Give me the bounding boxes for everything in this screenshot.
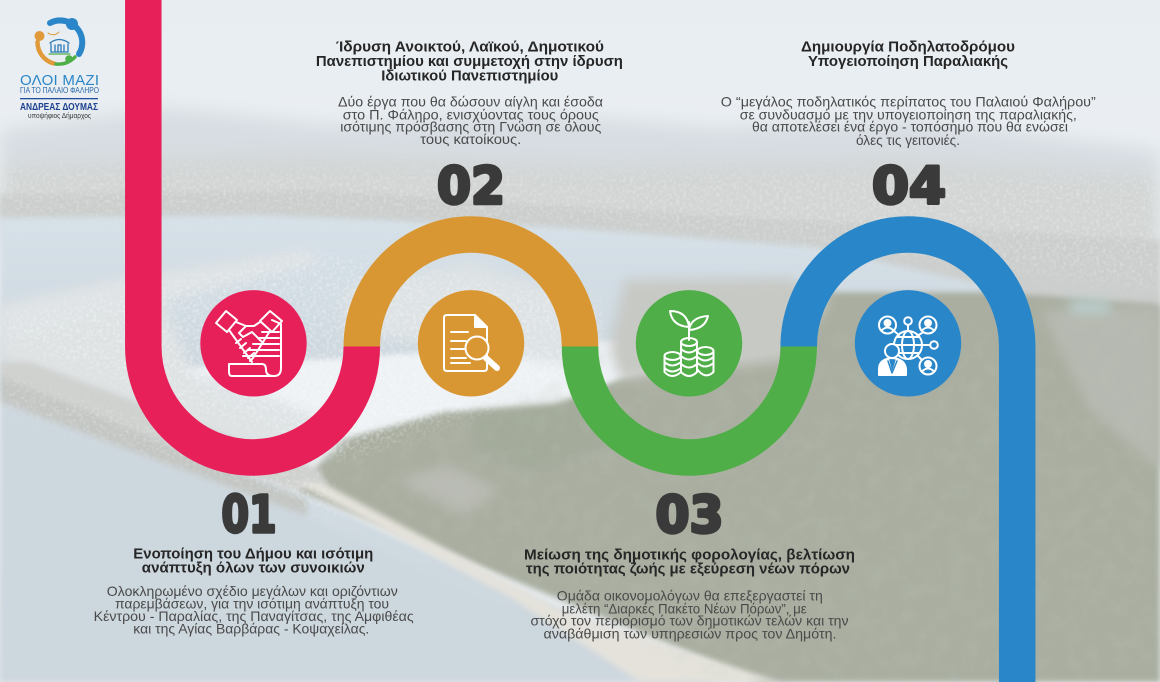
heading 01 [133,546,373,577]
body 03 [530,588,848,641]
heading 04: Δημιουργία Ποδηλατοδρόμου [801,40,1015,56]
body 02: τους κατοίκους. [420,131,521,147]
logo: ΓΙΑ ΤΟ ΠΑΛΑΙΟ ΦΑΛΗΡΟ [20,85,99,95]
body 01: Ολοκληρωμένο σχέδιο μεγάλων και οριζόντιων [107,583,398,599]
number 04: 04 [872,158,946,216]
body 03: μελέτη “Διαρκές Πακέτο Νέων Πόρων”, με [562,600,807,616]
body 01 [94,583,414,636]
icon: document with magnifier [418,290,524,396]
body 03: στόχο τον περιορισμό των δημοτικών τελών και την [530,613,848,629]
text block 02 [316,40,623,147]
body 04: σε συνδυασμό με την υπογειοποίηση της παραλιακής, [740,106,1077,122]
body 04: Ο “μεγάλος ποδηλατικός περίπατος του Παλαιού Φαλήρου” [721,94,1096,110]
text block 01 [94,546,414,636]
heading 04 [801,40,1015,70]
heading 02 [316,40,623,85]
heading 03: Μείωση της δημοτικής φορολογίας, βελτίωση [524,547,855,563]
body 03: Ομάδα οικονομολόγων θα επεξεργαστεί τη [557,588,823,604]
body 02 [338,94,603,147]
body 04: θα αποτελέσει ένα έργο - τοπόσημο που θα ενώσει [752,119,1068,135]
body 02: Δύο έργα που θα δώσουν αίγλη και έσοδα [338,94,603,110]
path segment: orange [362,235,580,346]
icon: sprout growing from coins [636,290,742,396]
heading 03: της ποιότητας ζωής με εξεύρεση νέων πόρων [526,562,850,578]
path segment: pink [143,0,362,457]
heading 01: Ενοποίηση του Δήμου και ισότιμη [133,546,373,562]
number 03: 03 [656,486,724,546]
body 04: όλες τις γειτονιές. [856,132,960,148]
text block 04 [721,40,1096,148]
logo [20,18,99,120]
heading 04: Υπογειοποίηση Παραλιακής [808,54,1008,70]
heading 03 [524,547,855,578]
heading 02: Ίδρυση Ανοικτού, Λαϊκού, Δημοτικού [336,40,604,56]
text block 03 [524,547,855,641]
body 02: στο Π. Φάληρο, ενισχύοντας τους όρους [343,106,599,122]
body 02: ισότιμης πρόσβασης στη Γνώση σε όλους [340,119,602,135]
icon: global network of people [855,290,961,396]
icon: handshake over document [200,290,307,396]
body 04 [721,94,1096,148]
logo: ΟΛΟΙ ΜΑΖΙ [20,72,99,89]
logo: υποψήφιος Δήμαρχος [28,113,92,120]
path segment: green [580,346,799,458]
winding timeline path [143,0,1017,682]
heading 02: Ιδιωτικού Πανεπιστημίου [381,69,558,85]
heading 01: ανάπτυξη όλων των συνοικιών [142,561,365,577]
body 03: αναβάθμιση των υπηρεσιών προς τον Δημότη. [544,625,836,641]
logo: ΑΝΔΡΕΑΣ ΔΟΥΜΑΣ [20,102,98,113]
logo ring [34,18,82,64]
heading 02: Πανεπιστημίου και συμμετοχή στην ίδρυση [316,54,623,70]
body 01: Κέντρου - Παραλίας, της Παναγίτσας, της Αμφιθέας [94,608,414,624]
number 02: 02 [437,158,505,216]
body 01: και της Αγίας Βαρβάρας - Κοψαχείλας. [133,620,369,636]
number 01: 01 [222,486,276,545]
path segment: blue [799,235,1017,682]
body 01: παρεμβάσεων, για την ισότιμη ανάπτυξη του [115,595,389,611]
